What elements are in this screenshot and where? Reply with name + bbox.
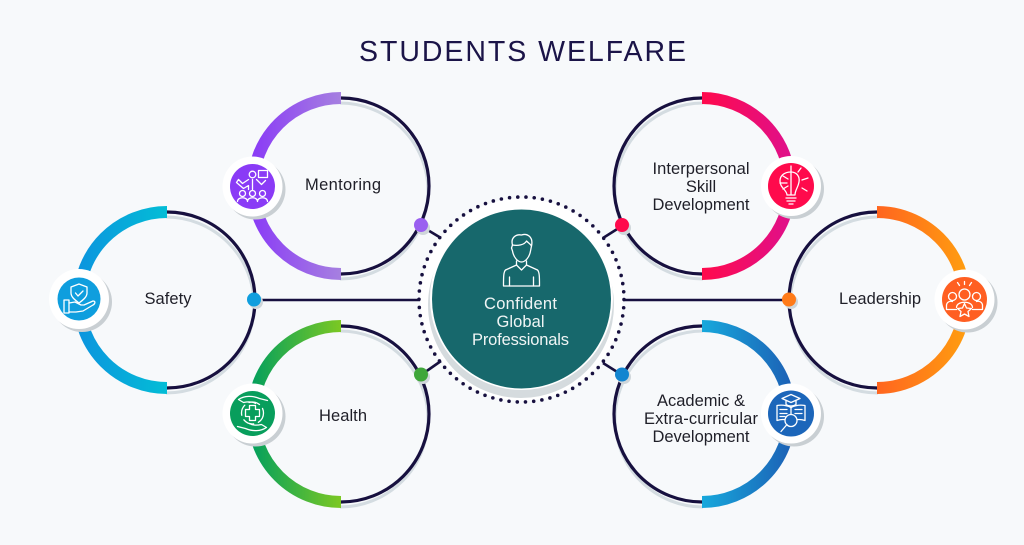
label: confident global professionals: Global [496, 313, 544, 331]
central hub [419, 197, 624, 402]
icon: health [222, 384, 286, 446]
label: academic and extra-curricular development: Academic & [657, 392, 745, 410]
label: leadership: Leadership [839, 290, 921, 308]
icon: safety [49, 269, 112, 332]
label: safety: Safety [144, 290, 192, 308]
icon: interpersonal skill development [761, 156, 824, 219]
icon: graduate person [504, 234, 540, 286]
icon: mentoring [222, 156, 286, 220]
panel: health [253, 326, 429, 507]
icon: academic development [761, 384, 824, 446]
label: confident global professionals: Professionals [472, 331, 569, 349]
title: STUDENTS WELFARE [359, 36, 686, 68]
connector lines [254, 226, 789, 375]
panel: safety [79, 212, 255, 393]
panel: interpersonal skill development [614, 98, 790, 279]
label: interpersonal skill development: Interpersonal [652, 160, 750, 178]
label: academic and extra-curricular development: Development [652, 428, 750, 446]
panel: mentoring [253, 98, 429, 279]
label: academic and extra-curricular development: Extra-curricular [644, 410, 758, 428]
label: interpersonal skill development: Skill [686, 178, 716, 196]
icon: leadership [934, 270, 998, 332]
label: health: Health [319, 407, 367, 425]
label: interpersonal skill development: Development [652, 196, 750, 214]
panel: leadership [789, 212, 965, 393]
panel: academic and extra-curricular development [614, 326, 790, 507]
node dots [247, 218, 798, 384]
label: mentoring: Mentoring [305, 176, 381, 194]
label: confident global professionals: Confident [484, 295, 557, 313]
